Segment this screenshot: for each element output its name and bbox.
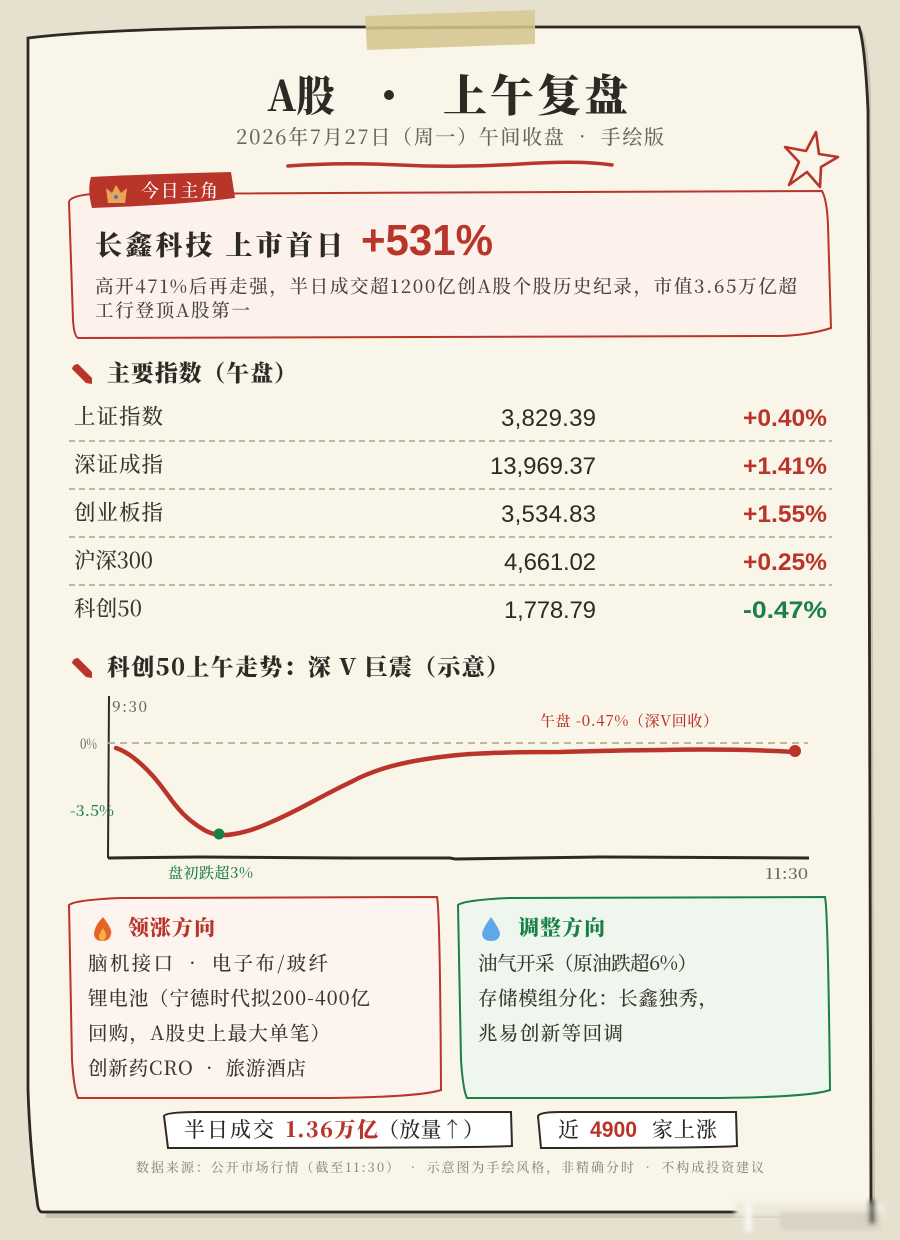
panel: adjusting sectors: 存储模组分化：长鑫独秀，: [478, 983, 718, 1011]
headline: 长鑫科技 上市首日: [95, 224, 343, 263]
title: [267, 60, 628, 124]
icon: water drop: [482, 917, 500, 941]
title underline: [288, 162, 612, 166]
table: indices: [69, 400, 832, 624]
row: SSE: +0.40%: [743, 405, 827, 432]
description: [95, 273, 797, 323]
icon: star: [785, 132, 838, 187]
line chart: -3.5%: [70, 800, 114, 821]
row: ChiNext: 创业板指: [74, 496, 163, 527]
big number: +531%: [361, 216, 493, 265]
row: CSI300: 4,661.02: [504, 549, 596, 576]
stat: volume: 1.36万亿: [286, 1114, 378, 1144]
row: CSI300: 沪深300: [74, 544, 153, 575]
panel: leading sectors: 领涨方向: [128, 912, 215, 942]
row: CSI300: [74, 544, 827, 576]
line chart: 午盘 -0.47%（深V回收）: [540, 710, 718, 731]
panel: adjusting sectors: 兆易创新等回调: [478, 1018, 623, 1046]
line chart: 盘初跌超3%: [168, 862, 253, 883]
row: STAR50: 1,778.79: [504, 597, 596, 624]
row: CSI300: +0.25%: [743, 549, 827, 576]
heading: indices: 主要指数（午盘）: [107, 355, 297, 388]
line chart: 0%: [80, 734, 97, 754]
line chart: 11:30: [765, 863, 808, 884]
row: SSE: 3,829.39: [501, 405, 596, 432]
stat: advancers: [538, 1112, 737, 1148]
stat: volume: （放量↑）: [378, 1114, 484, 1144]
description: 工行登顶A股第一: [95, 297, 250, 323]
footnote: 数据来源：公开市场行情（截至11:30） • 示意图为手绘风格，非精确分时 • 不构成投资建议: [136, 1157, 764, 1176]
icon: crown: [106, 185, 127, 203]
icon: flame: [94, 917, 111, 941]
description: 高开471%后再走强，半日成交超1200亿创A股个股历史纪录，市值3.65万亿超: [95, 273, 797, 299]
badge: today's lead: [89, 172, 235, 208]
panel: adjusting sectors: [458, 897, 830, 1098]
panel: adjusting sectors: 油气开采（原油跌超6%）: [478, 948, 697, 976]
row: SSE: [74, 400, 827, 432]
panel: leading sectors: 锂电池（宁德时代拟200-400亿: [88, 983, 370, 1011]
row: SZSE: 深证成指: [74, 448, 163, 479]
tape: [365, 10, 535, 50]
stat: advancers: 近: [558, 1114, 579, 1144]
line chart: [70, 696, 809, 884]
stat: volume: 半日成交: [184, 1114, 274, 1144]
panel: today's star: [69, 172, 831, 338]
panel: leading sectors: 脑机接口 • 电子布/玻纤: [88, 948, 328, 976]
row: ChiNext: +1.55%: [743, 501, 827, 528]
panel: leading sectors: 创新药CRO • 旅游酒店: [88, 1053, 306, 1081]
title: A股: [267, 64, 335, 124]
row: ChiNext: 3,534.83: [501, 501, 596, 528]
row: SSE: 上证指数: [74, 400, 163, 431]
badge: today's lead: 今日主角: [141, 177, 218, 203]
icon: pencil: [72, 658, 92, 678]
heading: trend: 科创50上午走势：深 V 巨震（示意）: [107, 649, 509, 682]
row: SZSE: +1.41%: [743, 453, 827, 480]
watermark: [735, 1200, 885, 1232]
panel: leading sectors: [69, 897, 441, 1098]
stat: volume: [164, 1112, 512, 1148]
row: STAR50: 科创50: [74, 592, 142, 623]
panel: leading sectors: 回购，A股史上最大单笔）: [88, 1018, 330, 1046]
title: 上午复盘: [443, 60, 628, 124]
row: STAR50: [74, 592, 827, 624]
panel: adjusting sectors: 调整方向: [518, 912, 605, 942]
line chart: 9:30: [112, 696, 147, 717]
stat: advancers: 家上涨: [652, 1114, 717, 1144]
stat: advancers: 4900: [590, 1117, 637, 1142]
subtitle: 2026年7月27日（周一）午间收盘 • 手绘版: [236, 121, 664, 150]
row: ChiNext: [74, 496, 827, 528]
row: STAR50: -0.47%: [743, 597, 827, 624]
icon: pencil: [72, 364, 92, 384]
row: SZSE: [74, 448, 827, 480]
row: SZSE: 13,969.37: [490, 453, 596, 480]
